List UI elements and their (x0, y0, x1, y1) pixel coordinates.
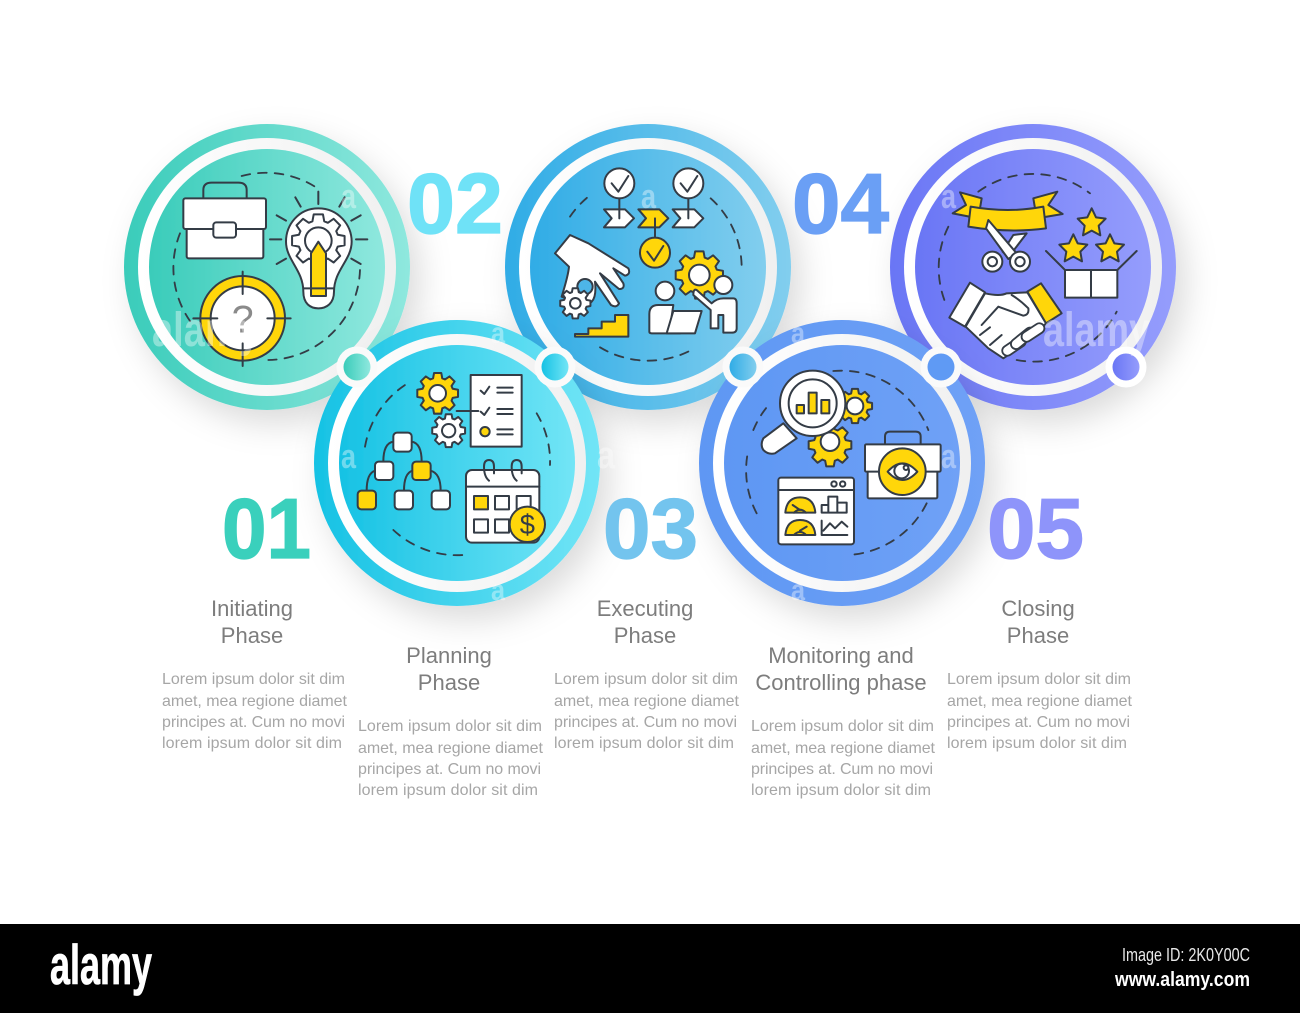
text block: executing phase: principes at. Cum no movi (554, 714, 737, 731)
heading: monitoring and controlling phase: Controlling phase (755, 670, 927, 695)
text block: monitoring and controlling phase (751, 718, 936, 799)
footer url: www.alamy.com (1114, 969, 1250, 991)
watermarks: a (941, 178, 957, 216)
icon: yellow gears (809, 389, 872, 466)
text block: initiating phase: principes at. Cum no movi (162, 714, 345, 731)
watermarks: alamy (152, 304, 260, 357)
number 05: 05 (987, 482, 1084, 577)
text block: planning phase: principes at. Cum no movi (358, 761, 541, 778)
text block: monitoring and controlling phase: lorem ipsum dolor sit dim (751, 782, 931, 799)
watermarks: a (597, 435, 616, 477)
number 03: 03 (603, 482, 698, 577)
icon: briefcase (183, 183, 266, 258)
panel: circle 4 disc (699, 320, 985, 606)
text block: initiating phase: amet, mea regione diamet (162, 693, 348, 710)
icon: checklist document (457, 375, 522, 447)
watermarks: a (941, 438, 957, 476)
icon: calendar with dollar coin (466, 460, 545, 543)
text block: closing phase: Lorem ipsum dolor sit dim (947, 671, 1131, 688)
connector dot 3 (722, 346, 764, 388)
icons: monitoring and controlling phase (746, 371, 941, 555)
watermarks: a (791, 317, 805, 350)
footer logo: alamy (50, 933, 152, 996)
heading: executing phase: Phase (614, 623, 676, 648)
heading: initiating phase: Initiating (211, 596, 293, 621)
icon: ribbon with scissors (953, 192, 1063, 272)
text block: monitoring and controlling phase: principes at. Cum no movi (751, 761, 933, 778)
text block: monitoring and controlling phase: amet, mea regione diamet (751, 740, 936, 757)
connector dot 4 (920, 346, 962, 388)
watermarks: a (341, 438, 357, 476)
watermarks: a (341, 178, 357, 216)
icon: white gear (432, 414, 465, 447)
connector dot 5 (1106, 346, 1146, 388)
watermarks: alamy (1043, 304, 1150, 357)
icons: initiating phase (173, 173, 367, 366)
panel: circle 5 disc (890, 124, 1176, 410)
panel: circle 1 disc (124, 124, 410, 410)
icon: milestone flow (604, 168, 703, 268)
icon: yellow gear (417, 373, 458, 414)
text block: monitoring and controlling phase: Lorem ipsum dolor sit dim (751, 718, 934, 735)
icon: magnifier with bar chart (762, 371, 845, 454)
watermarks: a (791, 574, 805, 607)
icon: target with question mark (193, 272, 291, 366)
icon: stars in box (1046, 208, 1137, 298)
text block: planning phase: amet, mea regione diamet (358, 740, 544, 757)
text block: executing phase (554, 671, 740, 752)
footer image id: Image ID: 2K0Y00C (1122, 945, 1250, 965)
icon: team with gear and laptop (649, 251, 737, 333)
heading: initiating phase: Phase (221, 623, 283, 648)
heading: planning phase: Planning (406, 643, 492, 668)
heading: closing phase: Phase (1007, 623, 1069, 648)
icons: executing phase (555, 168, 742, 361)
text block: initiating phase (162, 671, 348, 752)
text block: initiating phase: lorem ipsum dolor sit dim (162, 735, 342, 752)
panel: circle 3 disc (505, 124, 791, 410)
text block: closing phase: amet, mea regione diamet (947, 693, 1133, 710)
icons: closing phase (939, 174, 1137, 362)
text block: planning phase: lorem ipsum dolor sit dim (358, 782, 538, 799)
number 01: 01 (222, 482, 311, 577)
text block: initiating phase: Lorem ipsum dolor sit dim (162, 671, 345, 688)
icon: calendar with dollar coin: $ (520, 509, 535, 540)
icon: briefcase with eye (865, 432, 941, 498)
icons: planning phase (358, 373, 550, 555)
icon: light bulb with gear and pencil (270, 192, 367, 308)
number 04: 04 (792, 157, 889, 252)
watermarks: a (641, 178, 657, 216)
text block: planning phase: Lorem ipsum dolor sit dim (358, 718, 542, 735)
icon: yellow stairs (575, 315, 628, 337)
heading: closing phase: Closing (1001, 596, 1075, 621)
text block: planning phase (358, 718, 544, 799)
number 02: 02 (407, 157, 503, 252)
icon: dashboard window (778, 478, 854, 544)
heading: planning phase: Phase (418, 670, 480, 695)
text block: executing phase: amet, mea regione diamet (554, 693, 740, 710)
watermarks: a (491, 317, 505, 350)
footer band (0, 924, 1300, 1013)
icon: hand placing gear (555, 235, 629, 318)
connector dot 2 (534, 346, 576, 388)
watermarks (152, 178, 1150, 607)
text block: closing phase (947, 671, 1133, 752)
connector dot 1 (336, 346, 378, 388)
text block: executing phase: Lorem ipsum dolor sit dim (554, 671, 738, 688)
text block: executing phase: lorem ipsum dolor sit dim (554, 735, 734, 752)
text block: closing phase: principes at. Cum no movi (947, 714, 1130, 731)
panel: circle 2 disc (314, 320, 600, 606)
icon: handshake (949, 283, 1062, 358)
text block: closing phase: lorem ipsum dolor sit dim (947, 735, 1127, 752)
heading: executing phase: Executing (597, 596, 693, 621)
watermarks: a (491, 574, 505, 607)
heading: monitoring and controlling phase: Monitoring and (768, 643, 914, 668)
icon: target with question mark: ? (232, 298, 254, 342)
icon: tree diagram (358, 433, 450, 509)
